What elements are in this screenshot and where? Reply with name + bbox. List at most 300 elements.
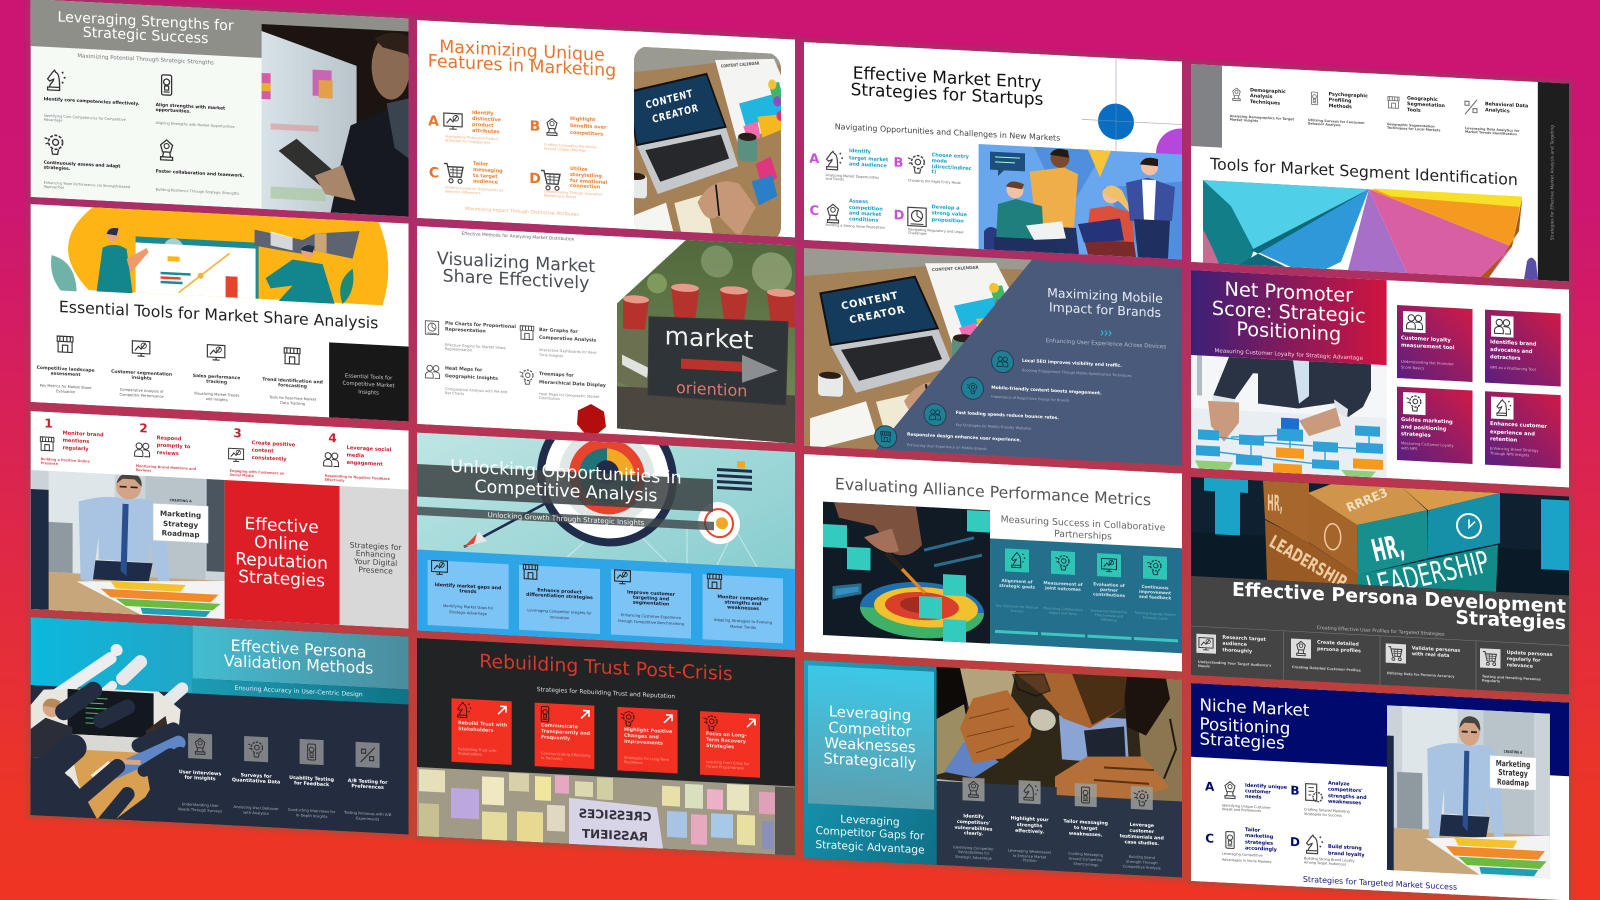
card: positive changes: Resilience xyxy=(624,760,643,765)
item: measurement: Impact and Value xyxy=(1049,611,1077,616)
item: demographic: Analysis xyxy=(1250,93,1273,100)
subtitle: Navigating Opportunities and Challenges in New Markets xyxy=(835,122,1060,143)
card: monitor competitor: strengths and xyxy=(724,599,762,607)
item C: Utilizing Customer Testimonials as xyxy=(445,185,503,192)
card: market gaps: trends xyxy=(459,588,477,595)
item 4: media xyxy=(347,452,365,459)
panel: Market Segment Tools slide xyxy=(1191,64,1570,284)
title panel: red: Effective xyxy=(245,514,319,538)
item D: D xyxy=(894,208,905,224)
cell: validate personas: Validate personas xyxy=(1412,645,1460,653)
photo: sticky notes wall xyxy=(417,767,795,856)
title band: Unlocking Opportunities in xyxy=(450,457,682,489)
item: measurement: joint outcomes xyxy=(1044,585,1081,593)
item B: Choose entry xyxy=(932,152,970,160)
title: Strategies for Startups xyxy=(851,80,1044,110)
item: align strengths: Aligning Strengths with Market Opportunities xyxy=(156,121,235,129)
cell: update personas: relevance xyxy=(1507,662,1534,669)
item 4: engagement xyxy=(347,460,383,468)
item: psychographic: Behavior Analysis xyxy=(1308,122,1341,127)
card: stakeholders xyxy=(452,698,512,765)
panel: Niche Market slide xyxy=(1191,683,1569,900)
item: sales performance xyxy=(193,344,240,403)
panel: Persona Development slide xyxy=(1191,475,1569,695)
item C xyxy=(810,196,885,230)
title: Share Effectively xyxy=(443,266,589,294)
item: pie charts: Pie Charts for Proportional xyxy=(445,320,516,330)
cell: research target: Needs xyxy=(1198,664,1210,668)
item B: Strategies for Success xyxy=(1304,812,1342,818)
item D: connection xyxy=(570,183,601,191)
card: differentiation: Innovation xyxy=(550,615,570,620)
panel: Competitive Analysis slide xyxy=(417,400,795,650)
item: sales performance: and Insights xyxy=(206,397,228,402)
item: trend identification: Tools for Real-Time Market xyxy=(268,395,317,402)
item: user interviews: for Insights xyxy=(185,774,216,782)
title panel: Effective Persona xyxy=(231,635,367,661)
item: surveys: with Analytics xyxy=(243,811,269,816)
item: behavioral: Behavioral Data xyxy=(1485,101,1528,109)
title panel: red: Reputation xyxy=(235,549,328,574)
item: competitive landscape: Competitive landscape xyxy=(37,364,95,373)
row: local SEO: Boosting Engagement Though Mobile Optimization Techniques xyxy=(1022,368,1132,378)
cell: update personas: regularly for xyxy=(1507,656,1541,663)
card: transparency xyxy=(535,703,594,769)
card: long-term recovery: Strategies xyxy=(706,742,734,750)
item: user interviews: Needs Through Surveys xyxy=(178,807,222,814)
item: geographic: Geographic xyxy=(1407,95,1438,103)
item: customer segmentation xyxy=(111,340,172,399)
cell: validate personas: Utilizing Data for Persona Accuracy xyxy=(1387,671,1455,679)
item A: Needs and Preferences xyxy=(1222,807,1261,813)
item: sales performance: tracking xyxy=(206,378,227,385)
item 2: Monitoring Brand Mentions and xyxy=(136,464,197,471)
item: highlight strengths: Position xyxy=(1023,858,1037,863)
item A: Identify unique xyxy=(1245,783,1288,791)
item: leverage testimonials: Strength Through xyxy=(1126,860,1158,865)
cell: research target: Understanding Your Target Audience's xyxy=(1198,660,1271,668)
item 2: Reviews xyxy=(136,468,151,473)
item: identify vulnerabilities: competitors' xyxy=(957,818,990,826)
item A: Attributes for Engagement xyxy=(445,138,491,145)
item: behavioral xyxy=(1465,99,1528,137)
photo: content creator desk: CREATOR xyxy=(651,102,700,126)
title: Evaluating Alliance Performance Metrics xyxy=(835,474,1151,509)
item A xyxy=(809,146,889,184)
title panel: red xyxy=(225,480,340,625)
item: measurement xyxy=(1043,550,1083,616)
photo: HR leadership cubes: LEADERSHIP xyxy=(1266,531,1350,593)
item B: B xyxy=(894,156,903,171)
item D xyxy=(1290,834,1365,868)
item B: (direct/indirec xyxy=(932,164,972,172)
panel: Online Reputation slide xyxy=(31,411,409,629)
title panel xyxy=(193,625,409,690)
item: heat maps: Comparative Analysis with Pie and xyxy=(445,387,507,394)
item: alignment xyxy=(996,548,1038,614)
item: A/B testing: Testing Personas with A/B xyxy=(343,811,392,817)
panel: Maximizing Unique Features slide xyxy=(417,20,795,238)
item: heat maps: Geographic Insights xyxy=(445,373,498,381)
item 4: Responding to Negative Feedback xyxy=(325,474,391,481)
title: Rebuilding Trust Post-Crisis xyxy=(479,651,733,685)
item: continuous improvement: Strategic Goals xyxy=(1143,616,1168,621)
item: psychographic: Psychographic xyxy=(1329,91,1368,99)
item A: Identify xyxy=(472,110,494,117)
item: competitive landscape: Evaluation xyxy=(56,389,75,394)
photo: sticky notes wall: RASSIENT xyxy=(581,826,648,844)
title panel: Leveraging xyxy=(829,703,911,724)
card: stakeholders: Stakeholders xyxy=(458,752,482,757)
card: long-term recovery: Focus on Long- xyxy=(706,730,747,739)
item 3: Engaging with Customers on xyxy=(230,469,285,476)
item: demographic: Market Insights xyxy=(1230,117,1258,123)
item: heat maps xyxy=(425,364,507,398)
item: surveys: Quantitative Data xyxy=(232,777,280,785)
item: leverage testimonials xyxy=(1120,785,1164,871)
cell: research target: thoroughly xyxy=(1222,647,1253,654)
illustration: startup team xyxy=(979,144,1183,260)
item D: proposition xyxy=(932,217,964,225)
photo: market orientation chalkboard: market xyxy=(665,321,754,355)
item: tailor messaging: to target xyxy=(1074,824,1098,832)
item 1: Monitor brand xyxy=(63,430,104,438)
title panel xyxy=(1191,270,1387,365)
title: Essential Tools for Market Share Analysis xyxy=(59,297,378,332)
row: fast loading: Key Strategies for Mobile-Friendly Websites xyxy=(956,423,1032,431)
cell: validate personas: with real data xyxy=(1412,651,1450,659)
item: continuous improvement: Continuous xyxy=(1141,583,1169,591)
item 2: promptly to xyxy=(157,443,191,450)
title panel xyxy=(808,665,934,810)
item: leverage testimonials: customer xyxy=(1129,827,1155,835)
decoration: circle and crosshair xyxy=(1082,56,1208,182)
item D xyxy=(894,202,968,238)
item B: B xyxy=(530,118,540,135)
row: fast loading xyxy=(924,403,1059,432)
card: positive changes xyxy=(617,707,678,773)
side strip with vertical text: Strategies for Effective Market Analysis and Targeting xyxy=(1550,125,1555,240)
item 1 xyxy=(40,418,104,465)
item C: Tailor xyxy=(473,161,489,168)
card: long-term recovery: Term Recovery xyxy=(706,736,747,745)
item: align strengths: opportunities. xyxy=(156,106,191,114)
photo: man with magnifying glass xyxy=(937,664,1182,802)
item D: Differentiating Through Innovative xyxy=(544,190,602,197)
title: Visualizing Market xyxy=(437,249,595,277)
title: Positioning xyxy=(1199,713,1290,738)
item: identify vulnerabilities: Identifying Competitor xyxy=(953,845,994,851)
item: alignment: Success xyxy=(1010,609,1024,613)
cell: update personas xyxy=(1480,648,1553,686)
item 1: mentions xyxy=(63,438,89,445)
panel: Persona Validation slide xyxy=(31,617,409,843)
item: leverage testimonials: Building Brand xyxy=(1129,855,1155,860)
item 3: content xyxy=(252,447,274,455)
item 2: reviews xyxy=(157,450,179,457)
item: behavioral: Analytics xyxy=(1485,107,1510,114)
title panel: Measuring Customer Loyalty for Strategic Advantage xyxy=(1215,348,1364,362)
item D: Marketing & Brand xyxy=(544,194,576,199)
title panel: Net Promoter xyxy=(1225,277,1353,306)
title: Features in Marketing xyxy=(428,52,616,81)
card: long-term recovery: Learning from Crisis for xyxy=(706,760,750,766)
item A: Analyzing Market Opportunities xyxy=(825,173,879,180)
item A: and Trends xyxy=(825,177,844,182)
card: enhances retention: Enhances customer xyxy=(1490,421,1547,430)
item A: Identifying Unique Customer xyxy=(1222,803,1271,810)
item C: messaging xyxy=(473,167,503,174)
item D: brand loyalty xyxy=(1328,850,1365,858)
item: core competencies xyxy=(44,70,140,127)
item B: t) xyxy=(932,169,936,175)
subtitle: Enhancing User Experience Across Devices xyxy=(1046,338,1166,350)
top caption: Effective Methods for Analyzing Market Distribution xyxy=(462,231,575,243)
footer text: Maximizing Impact Through Distinctive Attributes xyxy=(465,206,579,218)
card: guides marketing: with NPS xyxy=(1401,446,1418,451)
card: positive changes: Improvements xyxy=(624,738,663,746)
illustration: target and dart xyxy=(464,403,757,567)
item: assess and adapt: Continuously assess and adapt xyxy=(44,159,120,169)
item: evaluation: contributions xyxy=(1093,591,1125,599)
title panel: Strategically xyxy=(824,750,917,772)
card: differentiation xyxy=(519,564,600,634)
title: Leveraging Strengths for xyxy=(58,9,234,35)
item: usability testing: Conducting Interviews for xyxy=(288,808,336,814)
item: tailor messaging: weaknesses. xyxy=(1069,830,1103,838)
title: Maximizing Mobile xyxy=(1047,284,1163,305)
title panel: Weaknesses xyxy=(824,734,916,756)
item: psychographic: Methods xyxy=(1329,103,1352,110)
item B: competitors' xyxy=(1328,786,1363,794)
card: guides marketing: Guides marketing xyxy=(1401,417,1453,426)
subtitle: Leveraging xyxy=(840,812,900,828)
panel: Mobile Impact slide xyxy=(804,248,1182,466)
panel: Net Promoter Score slide xyxy=(1191,270,1569,488)
item: demographic xyxy=(1230,86,1294,125)
photo: content creator desk: CONTENT xyxy=(645,88,694,112)
item: trend identification: Trend identification and xyxy=(262,376,323,385)
item 4: Leverage social xyxy=(347,445,392,453)
item: bar graphs: Time Insights xyxy=(538,353,563,358)
item: psychographic: Profiling xyxy=(1329,97,1352,104)
subtitle: Strategic Advantage xyxy=(815,837,925,856)
subtitle panel: grey: Presence xyxy=(358,564,393,575)
item C: Leveraging Competitive xyxy=(1222,852,1263,858)
item D: for emotional xyxy=(570,178,608,186)
card: long-term recovery xyxy=(700,711,760,778)
card: positive changes: Highlight Positive xyxy=(624,726,673,735)
item C: strategies xyxy=(1245,839,1273,847)
callout: black box: Essential Tools for xyxy=(345,373,393,382)
item B: mode xyxy=(932,158,948,165)
item: geographic: Techniques for Local Markets xyxy=(1387,126,1440,132)
card: customer targeting: Enhancing Customer Experience xyxy=(621,613,682,620)
subtitle band: Ensuring Accuracy in User-Centric Design xyxy=(234,685,363,698)
title: Impact for Brands xyxy=(1049,299,1161,320)
card: transparency: Communicating Effectively xyxy=(541,751,591,758)
item 1: 1 xyxy=(44,416,53,431)
footer subtitle: Strategies for Targeted Market Success xyxy=(1303,875,1457,892)
photo: HR leadership cubes xyxy=(1191,475,1569,616)
item C: C xyxy=(429,165,439,182)
card: customer targeting: through Competitive Benchmarking xyxy=(618,619,684,626)
item: customer segmentation: Customer segmentation xyxy=(111,368,172,377)
item C: and market xyxy=(849,210,882,218)
item A: A xyxy=(1205,779,1215,794)
item C: Building a Strong Value Proposition xyxy=(825,223,885,230)
item B: competitors xyxy=(570,130,603,138)
item: behavioral: Leveraging Data Analytics for xyxy=(1465,126,1520,133)
card: positive changes: Changes and xyxy=(624,732,659,740)
card: guides marketing: and positioning xyxy=(1401,424,1447,433)
item: identify vulnerabilities: Identify xyxy=(963,813,984,820)
item: tailor messaging: Crafting Messaging xyxy=(1068,852,1103,857)
item: trend identification: Data Tracking xyxy=(280,401,305,406)
row: responsive design xyxy=(875,425,1021,455)
card: monitor competitor: Monitor competitor xyxy=(717,594,769,602)
title: Strategic Success xyxy=(83,25,208,47)
title: Strategies xyxy=(1455,607,1566,634)
item 1: Presence xyxy=(41,461,59,466)
icon: chevrons xyxy=(1101,330,1111,336)
item: evaluation: partner xyxy=(1100,586,1119,593)
item C xyxy=(430,161,503,194)
photo: market orientation chalkboard: oriention xyxy=(676,378,747,401)
item: identify vulnerabilities: Vulnerabilities for xyxy=(958,850,990,856)
card: monitor competitor: Market Trends xyxy=(730,625,756,630)
cell: validate personas xyxy=(1386,643,1460,679)
card: enhances retention: experience and xyxy=(1490,429,1535,438)
title: Niche Market xyxy=(1199,694,1310,720)
item: treemaps: Treemaps for xyxy=(539,371,574,378)
card: customer targeting xyxy=(611,570,691,639)
callout: black box: Insights xyxy=(358,389,379,397)
item D: Among Target Audiences xyxy=(1304,860,1346,867)
cell: persona profiles: persona profiles xyxy=(1317,646,1361,654)
item C: accordingly xyxy=(1245,845,1278,853)
item A: customer xyxy=(1245,788,1271,796)
card: transparency: Frequently xyxy=(541,734,571,741)
card: guides marketing: strategies xyxy=(1401,431,1431,439)
photo: businessman with tablet xyxy=(262,24,410,217)
row: fast loading: Fast loading speeds reduce bounce rates. xyxy=(956,410,1059,421)
item: leverage testimonials: Leverage xyxy=(1130,821,1154,829)
photo: man at marketing roadmap: CREATING A xyxy=(1504,749,1523,755)
card: customer targeting: Improve customer xyxy=(627,589,676,597)
item: evaluation: Evaluating Partnership xyxy=(1091,609,1127,614)
cell: research target: Research target xyxy=(1222,634,1267,642)
item: foster collaboration: Foster collaboration and teamwork. xyxy=(156,168,244,179)
subtitle: Strategies for Rebuilding Trust and Reputation xyxy=(537,686,675,700)
item C: Selection Influencers xyxy=(445,189,481,195)
item: evaluation: Evaluation of xyxy=(1093,581,1125,589)
card: advocates: detractors xyxy=(1490,354,1521,362)
cell: research target xyxy=(1196,633,1271,672)
item D: storytelling xyxy=(570,172,602,180)
card: stakeholders: Rebuild Trust with xyxy=(458,720,508,728)
item C: Assess xyxy=(849,198,868,205)
subtitle: Partnerships xyxy=(1054,528,1112,542)
title panel: Positioning xyxy=(1236,317,1341,345)
item 2: 2 xyxy=(139,421,148,436)
card: transparency: Communicate xyxy=(541,722,579,730)
item 1: Building a Positive Online xyxy=(41,457,90,464)
card: customer targeting: segmentation xyxy=(633,599,669,607)
subtitle panel: grey: Your Digital xyxy=(353,556,397,567)
item: identify vulnerabilities xyxy=(953,777,994,861)
photo: HR leadership cubes: HR, xyxy=(1368,527,1408,569)
card: market gaps: Identifying Market Gaps for xyxy=(443,604,494,610)
item: competitive landscape: assessment xyxy=(51,370,81,378)
item: A/B testing: A/B Testing for xyxy=(348,777,388,785)
item: continuous improvement xyxy=(1134,555,1175,621)
panel: Alliance Metrics slide xyxy=(804,454,1182,672)
subtitle band: Unlocking Growth Through Strategic Insights xyxy=(488,511,645,527)
card: advocates: Identifies brand xyxy=(1490,339,1537,348)
card: stakeholders: Rebuilding Trust with xyxy=(458,747,497,753)
item: identify vulnerabilities: Strategic Advantage xyxy=(955,855,993,861)
subtitle: Creating Effective User Profiles for Targeted Strategies xyxy=(1317,625,1445,638)
item: user interviews: Understanding User xyxy=(182,802,219,808)
title panel: Competitor xyxy=(828,719,912,740)
photo: content creator desk: CONTENT CALENDAR xyxy=(721,61,760,69)
item B xyxy=(1290,778,1367,819)
photo: man reviewing flowchart xyxy=(1191,355,1387,478)
row: local SEO: Local SEO improves visibility and traffic. xyxy=(1022,358,1122,369)
photo: man at marketing roadmap: Roadmap xyxy=(162,528,200,539)
item: user interviews: User Interviews xyxy=(179,769,221,777)
icon: red hexagon xyxy=(577,403,606,435)
card: transparency: Transparently and xyxy=(541,728,591,736)
cell: update personas: Regularly xyxy=(1482,678,1501,683)
card: monitor competitor: weaknesses xyxy=(727,604,759,612)
item: heat maps: Heat Maps for xyxy=(445,365,483,373)
subtitle panel: grey xyxy=(340,486,409,629)
photo: man at marketing roadmap: Marketing xyxy=(160,508,201,519)
item A: product xyxy=(472,122,494,129)
item 4 xyxy=(324,431,392,485)
card: advocates: advocates and xyxy=(1490,347,1533,355)
item: psychographic xyxy=(1308,90,1368,129)
item A: and audience xyxy=(849,161,887,169)
title: Strategies xyxy=(1199,728,1285,753)
illustration: people with telescope and chart xyxy=(51,205,388,307)
card: loyalty tool: measurement tool xyxy=(1401,343,1455,351)
item: alignment: Alignment of xyxy=(1002,577,1033,585)
item D: strong value xyxy=(932,210,968,218)
item A: attributes xyxy=(472,128,500,135)
item D: Building Strong Brand Loyalty xyxy=(1304,856,1354,863)
card: monitor competitor: Adapting Strategies to Evolving xyxy=(714,618,772,625)
item: pie charts: Representation xyxy=(445,347,472,352)
item: assess and adapt: strategies. xyxy=(44,164,71,172)
item D: Utilize xyxy=(570,166,588,173)
subtitle: Competitor Gaps for xyxy=(816,823,925,842)
photo: HR leadership cubes: HR, xyxy=(1267,490,1283,516)
item: core competencies: Identify core competencies effectively. xyxy=(44,96,140,107)
row: responsive design: Responsive design enhances user experience. xyxy=(907,432,1021,443)
row: mobile-friendly content: Importance of Responsive Design for Brands xyxy=(991,395,1069,403)
photo: target chart with pencil xyxy=(823,502,990,644)
cell: research target: audience xyxy=(1222,640,1248,647)
card: enhances retention: retention xyxy=(1490,436,1518,444)
item: assess and adapt xyxy=(44,135,130,193)
item: tailor messaging: Tailor messaging xyxy=(1063,818,1108,826)
row: mobile-friendly content xyxy=(962,377,1102,406)
item: pie charts: Effective Graphs for Market Share xyxy=(445,343,507,350)
card: differentiation: Enhance product xyxy=(537,587,583,595)
